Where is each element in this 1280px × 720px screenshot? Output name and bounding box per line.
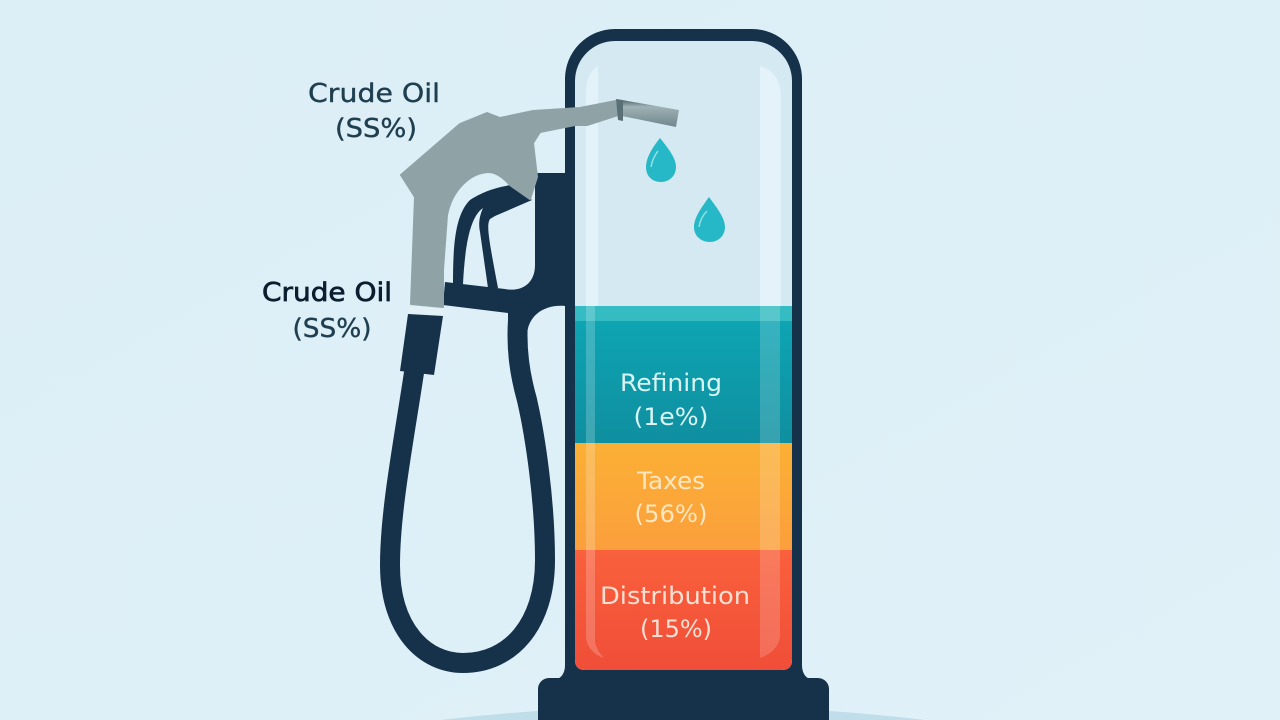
fuel drop 1 bbox=[646, 138, 676, 182]
label: crude oil lower: (SS%) bbox=[292, 314, 372, 344]
fuel nozzle bbox=[400, 99, 679, 375]
label: crude oil upper: Crude Oil bbox=[308, 79, 440, 109]
grip sleeve bbox=[400, 314, 443, 375]
nozzle tip bbox=[622, 100, 679, 127]
segment: refining bbox=[575, 321, 792, 443]
label: taxes: Taxes bbox=[636, 467, 705, 495]
nozzle body bbox=[401, 101, 618, 307]
label: taxes: (56%) bbox=[634, 500, 708, 528]
label: crude oil lower bbox=[262, 278, 392, 344]
dark pump bracket bbox=[443, 173, 575, 640]
segment: distribution bbox=[575, 550, 792, 670]
glass tube bbox=[555, 29, 812, 680]
label: distribution bbox=[600, 582, 750, 643]
label: distribution: (15%) bbox=[640, 615, 712, 643]
segment: taxes bbox=[575, 443, 792, 550]
label: refining: (1e%) bbox=[634, 403, 708, 431]
label: crude oil lower: Crude Oil bbox=[262, 278, 392, 308]
fuel drop 2 bbox=[694, 197, 725, 242]
floor shadow ellipse bbox=[440, 706, 925, 720]
pump body and trigger guard bbox=[443, 173, 575, 640]
hose bbox=[390, 320, 545, 663]
fuel column bbox=[575, 306, 792, 670]
nozzle collar stripe bbox=[408, 306, 443, 315]
label: crude oil upper bbox=[308, 79, 440, 144]
label: crude oil upper: (SS%) bbox=[335, 114, 417, 144]
label: taxes bbox=[634, 467, 708, 528]
label: distribution: Distribution bbox=[600, 582, 750, 610]
fuel right highlight bbox=[760, 306, 780, 658]
tube frame bbox=[555, 29, 812, 680]
label: refining bbox=[620, 369, 722, 431]
fuel left highlight bbox=[586, 306, 604, 658]
nozzle ring bbox=[616, 99, 623, 121]
label: refining: Refining bbox=[620, 369, 722, 397]
pump base bbox=[538, 678, 829, 720]
infographic canvas bbox=[263, 29, 924, 720]
glass highlights bbox=[586, 66, 598, 310]
trigger guard bbox=[453, 185, 532, 288]
tube interior bbox=[575, 41, 792, 670]
